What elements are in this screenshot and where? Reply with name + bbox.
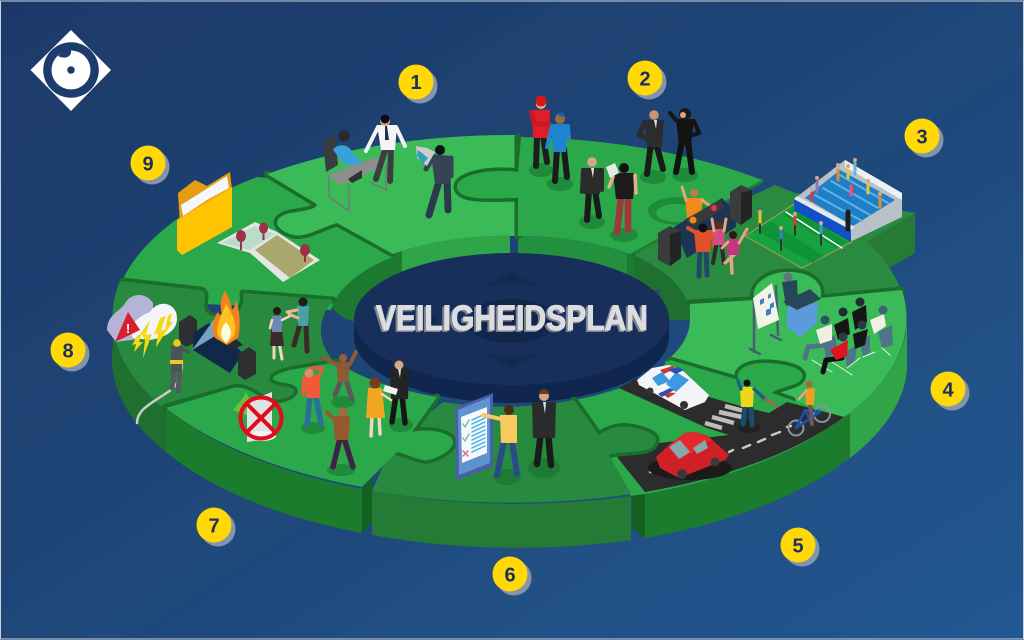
number badge 5: 5 [792, 536, 804, 558]
illustration 7: security man with ID [383, 360, 413, 432]
number badge 2: 2 [639, 68, 651, 90]
woman [270, 307, 290, 359]
illustration 2: firefighter and police [529, 96, 699, 242]
logo [30, 30, 111, 111]
puzzle piece 2 [457, 137, 762, 254]
number badge 1: 1 [410, 72, 422, 94]
crowd pink top [712, 219, 726, 263]
firefighter [529, 96, 553, 177]
number badge 4 [930, 372, 970, 410]
illustration 7: man with bottle [327, 408, 355, 476]
number badge 4: 4 [942, 380, 954, 402]
crowd red shirt [688, 224, 714, 276]
title: VEILIGHEIDSPLAN [376, 299, 648, 338]
illustration 7: woman in yellow dress [366, 378, 391, 436]
speaker right [730, 185, 752, 225]
illustration 8: firefighter with hose [137, 339, 188, 423]
man [287, 298, 309, 351]
road markings [650, 426, 791, 472]
illustration 6: man in yellow [483, 405, 521, 485]
puzzle piece 1 [267, 135, 517, 254]
illustration 8: fire on stage [179, 290, 256, 380]
number badge 7 [196, 508, 236, 546]
organiser with checklist [606, 163, 638, 242]
woman in black with radio [670, 108, 699, 182]
zebra crossing [705, 406, 744, 428]
illustration 6: man in suit [528, 389, 560, 478]
suit man holding plan [416, 145, 451, 215]
seated woman [333, 145, 360, 165]
ring: inner walls [331, 236, 690, 322]
number badge 3 [904, 118, 944, 158]
desk [328, 157, 386, 185]
crowd magenta dancer [722, 229, 747, 273]
speaker [179, 315, 197, 347]
illustration 8: arguing couple [270, 298, 309, 359]
security suit man [579, 157, 605, 229]
water spray [192, 318, 225, 350]
flame [213, 290, 240, 345]
illustration 5: traffic controller [738, 380, 777, 433]
puzzle piece 9 [120, 177, 400, 310]
suit man with walkie [639, 110, 666, 184]
steward [846, 212, 850, 229]
number badge 5 [780, 528, 820, 566]
disk eye emblem [426, 272, 596, 368]
stand [794, 160, 902, 241]
white shirt man [366, 114, 405, 181]
stage [193, 323, 243, 373]
illustration 5: cyclist [788, 380, 830, 436]
illustration 9: map with pins [217, 222, 320, 282]
illustration 2: DJ booth and crowd [658, 185, 752, 276]
speaker left [658, 226, 681, 266]
illustration 5: police car [637, 365, 709, 410]
puzzle piece 8 [112, 281, 337, 420]
puzzle piece 7 [166, 362, 453, 487]
illustration 8: warning storm cloud [107, 295, 177, 358]
number badge 8: 8 [62, 340, 74, 362]
number badge 1 [398, 64, 438, 104]
number badge 6 [492, 556, 532, 596]
speaker [238, 347, 256, 380]
central disk [354, 253, 669, 403]
illustration 7: dancing man [323, 352, 356, 408]
illustration 9: folder [177, 172, 232, 255]
pitch [745, 204, 852, 268]
ring: outer side walls [112, 213, 915, 548]
illustration 4: flipchart [750, 283, 781, 354]
puzzle piece 5 with road [574, 360, 844, 496]
illustration 1: desk meeting [323, 114, 451, 215]
illustration 5: red car [648, 432, 732, 480]
puzzle piece 4 [665, 272, 907, 420]
booth [674, 198, 736, 258]
illustration 4: speaker at podium [782, 272, 821, 337]
number badge 3: 3 [916, 126, 928, 148]
players [760, 214, 821, 240]
spectators [812, 163, 880, 207]
police officer [547, 112, 573, 191]
illustration 8: warning storm cloud: ! [126, 321, 130, 336]
chair [323, 134, 338, 172]
number badge 9 [130, 146, 170, 184]
barrier [794, 199, 851, 242]
puzzle piece 3 [635, 185, 915, 320]
number badge 7: 7 [208, 516, 220, 538]
number badge 8 [50, 332, 90, 372]
illustration 6: tablet checklist [455, 393, 493, 480]
illustration 4: seated audience [805, 298, 893, 375]
illustration 7: no drugs sign [233, 392, 282, 442]
puzzle piece 6 [372, 400, 656, 503]
number badge 6: 6 [504, 564, 516, 586]
illustration 3: stadium [745, 158, 902, 268]
number badge 2 [628, 60, 666, 100]
illustration 7: drunk man red shirt [301, 368, 325, 434]
DJ [682, 187, 713, 218]
number badge 9: 9 [142, 154, 154, 176]
road [617, 378, 844, 492]
